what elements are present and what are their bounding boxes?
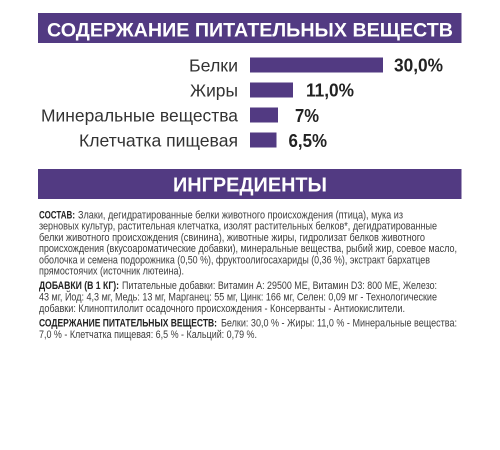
row: fats: Жиры bbox=[190, 80, 238, 100]
row: fats bbox=[190, 80, 354, 101]
row: protein: 30,0% bbox=[394, 56, 443, 76]
text block: additives per kg bbox=[39, 280, 437, 315]
row: minerals: 7% bbox=[295, 106, 319, 126]
text block: composition: Злаки, дегидратированные белки животного происхождения (птица), мука из bbox=[78, 209, 403, 221]
text block: composition bbox=[39, 209, 457, 278]
text block: nutrient content summary: 7,0 % - Клетчатка пищевая: 6,5 % - Кальций: 0,79 %. bbox=[39, 329, 257, 341]
row: protein bbox=[189, 56, 443, 76]
text block: additives per kg: Питательные добавки: Витамин А: 29500 МЕ, Витамин D3: 800 МЕ, Железо: bbox=[122, 280, 437, 292]
text block: additives per kg: добавки: Клиноптилолит осадочного происхождения - Консерванты - Антиокислители. bbox=[39, 303, 405, 315]
row: protein: Белки bbox=[189, 56, 238, 76]
heading banner: nutrient content: СОДЕРЖАНИЕ ПИТАТЕЛЬНЫХ ВЕЩЕСТВ bbox=[47, 19, 453, 41]
text block: composition: СОСТАВ: bbox=[39, 209, 75, 221]
row: dietary fibre: 6,5% bbox=[288, 131, 327, 151]
row: minerals: Минеральные вещества bbox=[41, 106, 238, 126]
heading banner: ingredients: ИНГРЕДИЕНТЫ bbox=[173, 175, 327, 197]
text block: nutrient content summary: СОДЕРЖАНИЕ ПИТАТЕЛЬНЫХ ВЕЩЕСТВ: bbox=[39, 318, 217, 330]
bar chart: nutrient percentages bbox=[41, 56, 443, 151]
text block: nutrient content summary bbox=[39, 318, 457, 341]
row: dietary fibre bbox=[79, 131, 327, 151]
row: fats: 11,0% bbox=[306, 81, 354, 101]
heading banner: nutrient content bbox=[38, 13, 462, 43]
text block: composition: прямостоячих (источник лютеина). bbox=[39, 266, 184, 278]
text block: nutrient content summary: Белки: 30,0 % - Жиры: 11,0 % - Минеральные вещества: bbox=[221, 318, 457, 330]
row: dietary fibre: Клетчатка пищевая bbox=[79, 131, 238, 151]
text block: composition: белки животного происхождения (свинина), животные жиры, гидролизат белков животного bbox=[39, 232, 425, 244]
heading banner: ingredients bbox=[38, 169, 462, 199]
text block: additives per kg: ДОБАВКИ (В 1 КГ): bbox=[39, 280, 119, 292]
